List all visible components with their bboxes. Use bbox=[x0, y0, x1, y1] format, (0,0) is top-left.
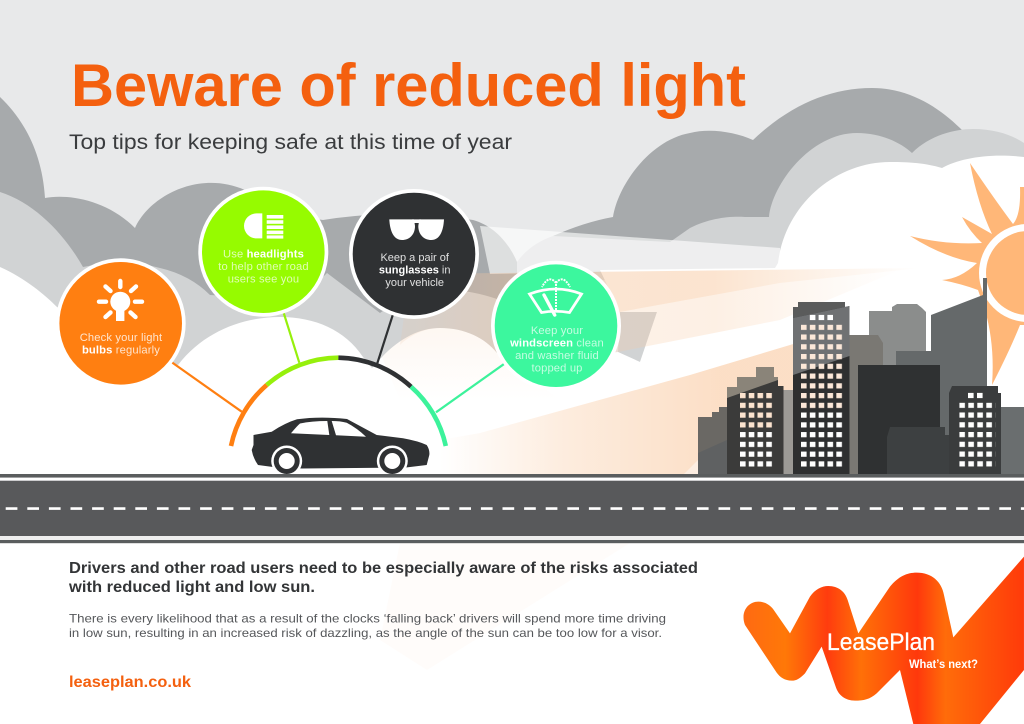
city skyline bbox=[698, 278, 1024, 474]
bold intro text: Drivers and other road users need to be especially aware of the risks associated bbox=[69, 560, 698, 577]
road bbox=[0, 474, 1024, 543]
icon: light bulb bbox=[99, 281, 142, 321]
body text: There is every likelihood that as a result of the clocks ‘falling back’ drivers will spend more time driving bbox=[69, 613, 666, 626]
building: low front block bbox=[887, 427, 953, 474]
tip text: windscreen: Keep your bbox=[531, 325, 583, 337]
building: angled tall block bbox=[896, 278, 987, 474]
building: right tower bbox=[949, 386, 1001, 474]
building: far right block bbox=[1001, 407, 1024, 474]
building: tall central tower bbox=[793, 302, 850, 474]
icon: windscreen wiper and washer bbox=[530, 279, 582, 315]
tip text: windscreen: and washer fluid bbox=[515, 350, 599, 362]
bold intro text bbox=[68, 560, 698, 596]
bold intro text: with reduced light and low sun. bbox=[68, 579, 315, 596]
website link: leaseplan.co.uk bbox=[69, 674, 191, 691]
building: gap block bbox=[783, 390, 793, 474]
sun bbox=[910, 163, 1024, 385]
tip: light bulbs bbox=[56, 258, 186, 388]
tip text: sunglasses: Keep a pair of bbox=[380, 252, 450, 264]
tip: sunglasses bbox=[349, 189, 479, 319]
tip text: sunglasses: sunglasses in bbox=[379, 265, 450, 277]
tip text: windscreen: windscreen clean bbox=[510, 338, 604, 350]
body text: in low sun, resulting in an increased risk of dazzling, as the angle of the sun can be too low for a visor. bbox=[69, 627, 662, 640]
body text bbox=[69, 613, 666, 640]
clouds: mid grey layer bbox=[0, 129, 1024, 400]
connector: sunglasses bbox=[377, 313, 393, 363]
tip text: headlights: to help other road bbox=[218, 261, 309, 273]
building: mid back block bbox=[849, 335, 896, 474]
connector: windscreen bbox=[436, 363, 505, 412]
tip: windscreen bbox=[491, 261, 621, 391]
subtitle: Top tips for keeping safe at this time of year bbox=[69, 131, 512, 154]
sky background bbox=[0, 0, 1024, 480]
building: left tower bbox=[727, 367, 784, 474]
arc around car bbox=[231, 358, 446, 446]
connector: light bulbs bbox=[170, 361, 242, 412]
building: dark block bbox=[858, 365, 940, 474]
icon: sunglasses bbox=[389, 219, 444, 240]
tip text: headlights: users see you bbox=[228, 274, 299, 286]
logo wordmark: LeasePlan bbox=[827, 629, 935, 656]
tip text: light bulbs: bulbs regularly bbox=[82, 344, 160, 356]
building: left stepped block bbox=[698, 407, 727, 474]
building: rounded back block bbox=[869, 304, 926, 365]
LeasePlan logo bbox=[744, 557, 1024, 724]
tip: headlights bbox=[198, 187, 328, 317]
clouds: dark grey layer bbox=[0, 88, 962, 340]
title: Beware of reduced light bbox=[71, 52, 746, 119]
tip text: sunglasses: your vehicle bbox=[385, 277, 444, 289]
car bbox=[252, 418, 429, 481]
sun beams bbox=[380, 226, 920, 670]
clouds: white layer bbox=[0, 156, 1024, 480]
connector: headlights bbox=[283, 312, 299, 363]
tip text: light bulbs: Check your light bbox=[80, 332, 163, 344]
logo tagline: What’s next? bbox=[909, 658, 978, 671]
icon: headlight bbox=[244, 213, 283, 239]
tip text: headlights: Use headlights bbox=[223, 249, 304, 261]
tip text: windscreen: topped up bbox=[531, 362, 583, 374]
